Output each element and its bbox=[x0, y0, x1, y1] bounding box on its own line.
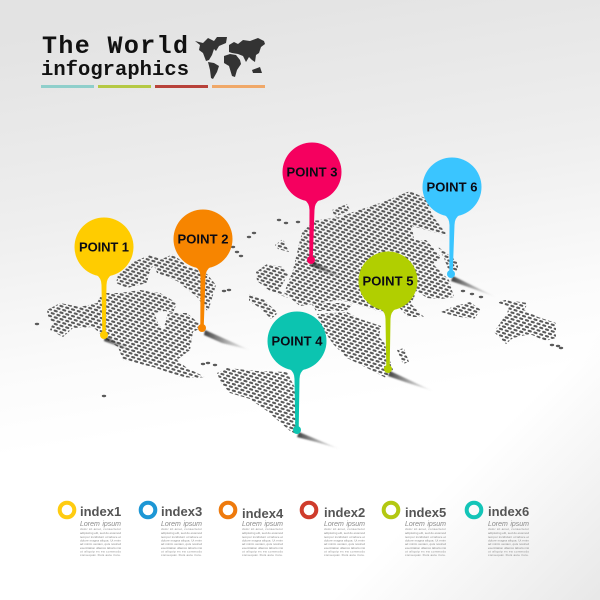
legend: index4: adipiscing elit, sed do eiusmod bbox=[242, 531, 283, 535]
pin: point 5: POINT 5 bbox=[362, 274, 414, 288]
pin: point 1: POINT 1 bbox=[79, 240, 129, 254]
legend: index3: dolore magna aliqua. Ut enim bbox=[161, 538, 202, 542]
pin shadows bbox=[104, 261, 496, 449]
legend: index2: adipiscing elit, sed do eiusmod bbox=[324, 531, 365, 535]
legend: index1: dolore magna aliqua. Ut enim bbox=[80, 538, 122, 542]
legend: index5 bbox=[384, 503, 446, 557]
legend: index2 bbox=[302, 503, 366, 557]
legend: index6: consequat. Duis aute irure. bbox=[488, 553, 529, 557]
legend: index4: consequat. Duis aute irure. bbox=[242, 553, 283, 557]
pin: point 4: POINT 4 bbox=[272, 334, 323, 348]
legend: index3 bbox=[141, 503, 202, 557]
legend: index6: Lorem bbox=[488, 521, 508, 528]
legend: index4: exercitation ullamco laboris nisi bbox=[242, 546, 283, 550]
legend: index2: dolor sit amet, consectetur bbox=[324, 527, 365, 531]
legend: index2: index2 bbox=[324, 505, 365, 520]
pin: point 1 bbox=[74, 218, 134, 339]
legend: index5: index5 bbox=[405, 505, 446, 520]
legend: index2: ipsum bbox=[346, 521, 365, 528]
title bbox=[41, 32, 189, 82]
heading: The World: The World bbox=[42, 32, 188, 61]
title colour bars bbox=[41, 85, 265, 88]
legend: index5: Lorem bbox=[405, 521, 425, 528]
legend: index1: dolor sit amet, consectetur bbox=[80, 527, 121, 531]
legend: index2: ad minim veniam, quis nostrud bbox=[324, 542, 365, 546]
legend: index6: dolore magna aliqua. Ut enim bbox=[488, 538, 530, 542]
legend: index6: adipiscing elit, sed do eiusmod bbox=[488, 531, 529, 535]
legend: index6: ut aliquip ex ea commodo bbox=[488, 550, 529, 554]
legend: index4: Lorem bbox=[242, 521, 262, 528]
legend: index2: dolore magna aliqua. Ut enim bbox=[324, 538, 366, 542]
legend: index2: ut aliquip ex ea commodo bbox=[324, 550, 365, 554]
legend: index1: tempor incididunt ut labore et bbox=[80, 535, 121, 539]
legend: index6: tempor incididunt ut labore et bbox=[488, 535, 529, 539]
legend: index2: exercitation ullamco laboris nisi bbox=[324, 546, 365, 550]
legend: index4: index4 bbox=[242, 506, 284, 521]
legend: index5: ut aliquip ex ea commodo bbox=[405, 550, 446, 554]
legend: index4 bbox=[221, 503, 284, 557]
isolated dots bbox=[35, 219, 563, 397]
legend: index5: consequat. Duis aute irure. bbox=[405, 553, 446, 557]
legend: index4: ut aliquip ex ea commodo bbox=[242, 550, 283, 554]
pin: point 6 bbox=[422, 158, 482, 278]
legend: index4: ipsum bbox=[264, 521, 283, 528]
legend: index3: ipsum bbox=[183, 521, 202, 528]
legend: index4: dolor sit amet, consectetur bbox=[242, 527, 283, 531]
legend: index6: ad minim veniam, quis nostrud bbox=[488, 542, 529, 546]
heading: infographics: infographics bbox=[41, 59, 189, 82]
legend: index3: ut aliquip ex ea commodo bbox=[161, 550, 202, 554]
pin: point 3 bbox=[282, 142, 342, 264]
legend: index2: tempor incididunt ut labore et bbox=[324, 535, 365, 539]
legend: index5: exercitation ullamco laboris nisi bbox=[405, 546, 446, 550]
icon: small world map bbox=[195, 37, 265, 79]
legend: index3: Lorem bbox=[161, 521, 181, 528]
legend: index5: dolore magna aliqua. Ut enim bbox=[405, 538, 446, 542]
legend: index1: Lorem bbox=[80, 521, 100, 528]
pin: point 2 bbox=[174, 210, 232, 332]
legend: index5: tempor incididunt ut labore et bbox=[405, 535, 446, 539]
pin: point 6: POINT 6 bbox=[426, 180, 478, 194]
legend: index6: exercitation ullamco laboris nisi bbox=[488, 546, 529, 550]
dotted world map bbox=[34, 192, 564, 434]
pin: point 4 bbox=[268, 312, 326, 434]
legend: index5: dolor sit amet, consectetur bbox=[405, 527, 446, 531]
legend: index5: ad minim veniam, quis nostrud bbox=[405, 542, 446, 546]
legend: index5: adipiscing elit, sed do eiusmod bbox=[405, 531, 446, 535]
legend: index6: dolor sit amet, consectetur bbox=[488, 527, 529, 531]
legend: index1: adipiscing elit, sed do eiusmod bbox=[80, 531, 121, 535]
legend: index3: adipiscing elit, sed do eiusmod bbox=[161, 531, 202, 535]
legend: index6 bbox=[467, 503, 530, 557]
legend: index6: index6 bbox=[488, 504, 529, 519]
legend: index4: tempor incididunt ut labore et bbox=[242, 535, 283, 539]
legend: index1 bbox=[60, 503, 122, 557]
legend: index3: index3 bbox=[161, 504, 202, 519]
legend: index1: ipsum bbox=[102, 521, 121, 528]
legend: index2: Lorem bbox=[324, 521, 344, 528]
legend: index3: exercitation ullamco laboris nisi bbox=[161, 546, 202, 550]
legend: index3: dolor sit amet, consectetur bbox=[161, 527, 202, 531]
legend: index6: ipsum bbox=[510, 521, 529, 528]
legend: index4: dolore magna aliqua. Ut enim bbox=[242, 538, 284, 542]
pin: point 3: POINT 3 bbox=[286, 164, 338, 180]
pin: point 5 bbox=[358, 252, 418, 373]
legend: index3: tempor incididunt ut labore et bbox=[161, 535, 202, 539]
legend: index4: ad minim veniam, quis nostrud bbox=[242, 542, 283, 546]
legend: index1: ut aliquip ex ea commodo bbox=[80, 550, 121, 554]
legend: index1: ad minim veniam, quis nostrud bbox=[80, 542, 121, 546]
legend: index3: ad minim veniam, quis nostrud bbox=[161, 542, 202, 546]
legend: index1: consequat. Duis aute irure. bbox=[80, 553, 121, 557]
legend: index3: consequat. Duis aute irure. bbox=[161, 553, 202, 557]
legend: index1: exercitation ullamco laboris nisi bbox=[80, 546, 121, 550]
legend: index5: ipsum bbox=[427, 521, 446, 528]
pin: point 2: POINT 2 bbox=[178, 232, 228, 246]
map dot rows bbox=[47, 192, 556, 434]
legend: index1: index1 bbox=[80, 504, 121, 519]
legend: index2: consequat. Duis aute irure. bbox=[324, 553, 365, 557]
